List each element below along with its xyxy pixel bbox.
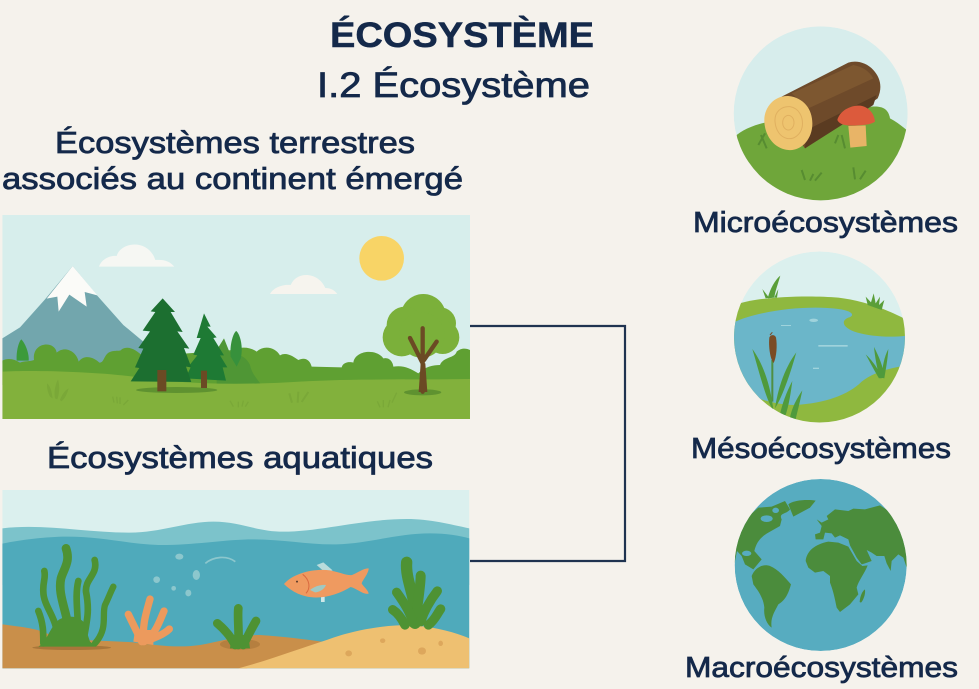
heading: terrestrial ecosystems: Écosystèmes terrestres (55, 125, 415, 160)
panel: aquatic scene (2, 490, 469, 668)
fish (317, 562, 333, 572)
small seaweed (217, 608, 256, 645)
icon: meso-ecosystem pond (732, 251, 907, 425)
connector bracket (470, 326, 625, 561)
right seaweed (393, 562, 441, 625)
heading: terrestrial ecosystems (2, 125, 463, 196)
heading: aquatic ecosystems: Écosystèmes aquatiques (47, 440, 433, 475)
title: ÉCOSYSTÈME (330, 15, 594, 55)
heading: terrestrial ecosystems: associés au continent émergé (2, 161, 463, 196)
subtitle: I.2 Écosystème (317, 66, 590, 105)
coral (128, 599, 169, 642)
icon: micro-ecosystem log and mushroom (734, 26, 908, 203)
icon: macro-ecosystem globe (725, 479, 912, 651)
panel: terrestrial landscape (2, 215, 470, 419)
label: meso-ecosystems: Mésoécosystèmes (691, 433, 951, 465)
label: micro-ecosystems: Microécosystèmes (693, 207, 958, 239)
kelp (38, 548, 113, 643)
label: macro-ecosystems: Macroécosystèmes (685, 652, 958, 684)
